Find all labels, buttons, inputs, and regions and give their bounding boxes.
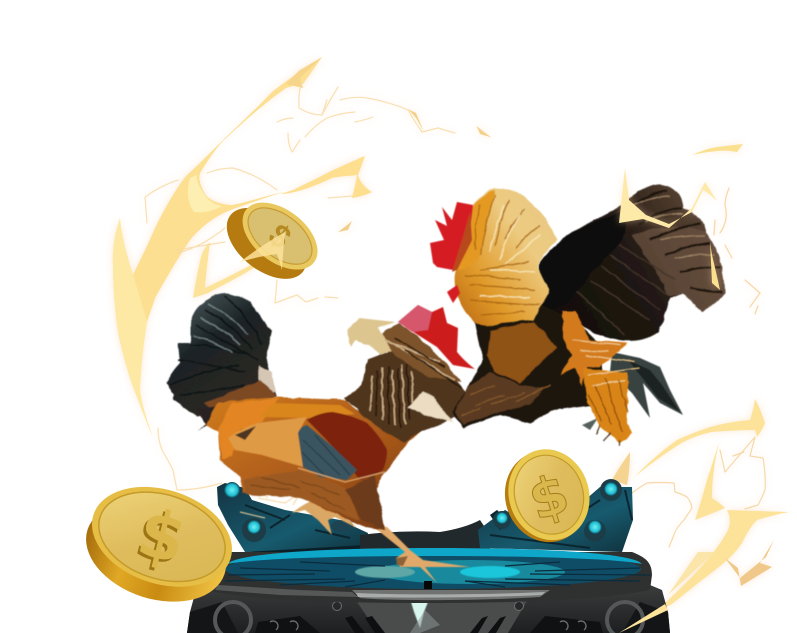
coin: right, upright: $ bbox=[521, 462, 576, 533]
coin: top, tumbling: $ bbox=[262, 216, 298, 256]
rooster: left, upper foot bbox=[240, 480, 357, 535]
platform: rim bbox=[204, 552, 652, 603]
coin: left, large: $ bbox=[128, 496, 191, 582]
rooster: left, neck hackle and head bbox=[345, 318, 467, 442]
lightning burst: left swoosh bbox=[113, 57, 490, 490]
rooster: left, lower leg and foot bbox=[370, 524, 470, 583]
platform: left teal side panel bbox=[217, 482, 370, 558]
platform: glowing blue disc bbox=[225, 548, 650, 589]
rooster: left, wing bbox=[228, 403, 387, 482]
rooster: left, body bbox=[205, 397, 423, 530]
coin: left, large bbox=[73, 470, 245, 619]
rooster: right, lower tail feathers bbox=[582, 352, 683, 430]
lightning burst: lower right bbox=[612, 399, 789, 632]
coin: top, tumbling bbox=[214, 184, 330, 295]
coin: left, large: $ bbox=[130, 493, 193, 579]
lightning burst: right upper sparks bbox=[692, 144, 760, 314]
lightning tail at bottom right bbox=[619, 604, 668, 633]
rooster: left, tail feathers bbox=[166, 293, 277, 431]
rooster: right, neck hackle bbox=[455, 188, 557, 326]
rooster: right, orange thigh feathers bbox=[560, 310, 640, 445]
platform: right teal side panel bbox=[360, 479, 633, 552]
rooster: right, wing bbox=[537, 184, 725, 341]
lightning over the right wing bbox=[619, 168, 720, 290]
rooster: right, comb and wattle bbox=[430, 202, 473, 303]
rooster: left, comb bbox=[398, 305, 475, 369]
platform: metal base bbox=[187, 585, 670, 633]
coin: right, upright bbox=[493, 439, 602, 553]
rooster: right, body bbox=[452, 305, 605, 428]
